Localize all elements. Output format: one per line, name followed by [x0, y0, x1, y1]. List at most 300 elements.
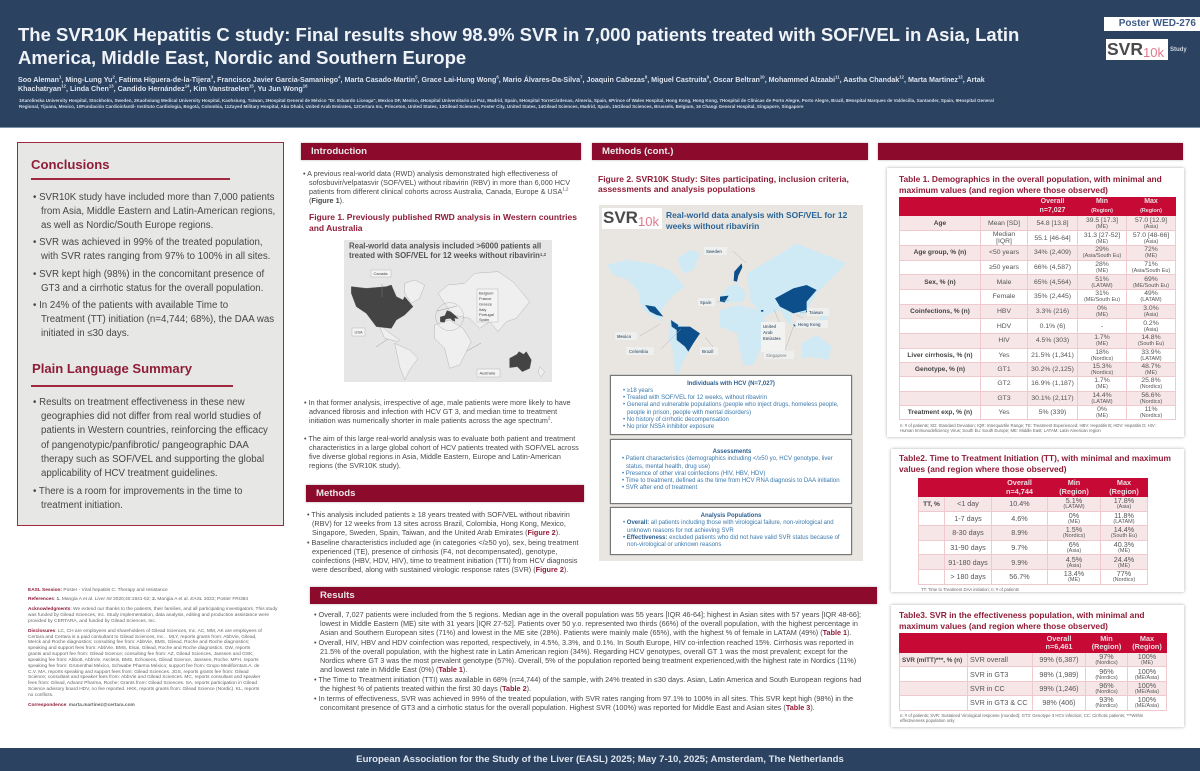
text: results bullets: lowest in Middle Eastern (ME) site with 31 years [IQR 27-52]. Patients over 50 y.o. represented two thirds (66%) of the overall population, with the highest percentage in: [320, 618, 858, 628]
table 1: demographics: (South Eu): [1138, 341, 1164, 347]
text: conclusions bullets: with SVR rates ranging from 97% to 100% in all sites.: [41, 251, 270, 262]
table 1: demographics: 31%: [1095, 290, 1109, 297]
table 2: time to treatment initiation: 9.9%: [1011, 558, 1028, 567]
labels: site countries: Colombia: [629, 349, 649, 354]
table 1: demographics: 16.9% (1,187): [1031, 380, 1074, 387]
table 1: demographics: (ME): [1145, 370, 1157, 376]
figure 2: heading: [666, 210, 847, 230]
table 1: demographics: 51%: [1095, 276, 1109, 283]
table 3: SVR: SVR (mITT)***, % (n): [902, 657, 962, 664]
table 2: time to treatment initiation: (Asia): [1067, 563, 1081, 569]
text: former analysis and aim: [304, 398, 579, 470]
table 2: time to treatment initiation: > 180 days: [950, 572, 986, 581]
text: assessments: • SVR after end of treatment: [622, 485, 697, 491]
box: analysis populations: [610, 507, 852, 555]
text: methods bullets: experienced (TE), presence of cirrhosis (F4, not decompensated), genotype,: [312, 546, 557, 556]
figure 2: logo: SVR: [603, 208, 638, 227]
table 2: time to treatment initiation: (LATAM): [1113, 519, 1135, 525]
table 1: demographics: GT2: [997, 380, 1011, 387]
text: results bullets: • Overall, 7,027 patients were included from the 5 regions. Median age in the overall population was 55 years [IQR 46-64]; highest in Asian sites with 57 years [IQR 48-66];: [314, 610, 861, 618]
section header: results: Results: [320, 590, 355, 601]
table 2: time to treatment initiation: 40.3%: [1114, 540, 1134, 549]
table 1: demographics: Overall: [1041, 198, 1064, 205]
table 1: demographics: (Region): [1140, 208, 1162, 214]
note: table 3 abbreviations: [900, 712, 1143, 723]
title: America, Middle East, Nordic and Southern Europe: [18, 46, 466, 68]
table 3: SVR: Overall: [1047, 634, 1071, 642]
labels: countries: USA: [354, 330, 363, 334]
text: session, references, acknowledgments, disclosures: C.V. MA, reports speaking and support fees from: Gilead Sciences. JGS, reports grants fee from: Gilead: [28, 670, 249, 675]
table 2: time to treatment initiation: 24.4%: [1114, 555, 1134, 564]
table 3: SVR: SVR in GT3 & CC: [970, 698, 1028, 707]
table 2: time to treatment initiation: (ME): [1118, 563, 1130, 569]
text: plain language bullets: • Results on treatment effectiveness in these new: [33, 397, 245, 408]
footer band: [0, 748, 1200, 771]
heading: figure 1: Figure 1. Previously published RWD analysis in Western countries: [309, 212, 577, 222]
table 3: SVR: (Nordics): [1095, 675, 1118, 681]
heading: plain language summary: Plain Language Summary: [32, 361, 192, 376]
text: methods bullets: were described, along with sustained virologic response rates (SVR) (Figure 2).: [312, 564, 568, 574]
text: individuals with HCV: people in prison, people with mental disorders): [627, 410, 751, 416]
affiliations: [19, 98, 994, 109]
text: session, references, acknowledgments, disclosures: Acknowledgments: We extend our thanks to the patients, their families, and all participating investigators. This study: [28, 607, 277, 612]
study logo: 10k: [1143, 45, 1164, 60]
table 3: SVR: (ME): [1141, 660, 1153, 666]
table 1: demographics: 34% (2,409): [1034, 249, 1071, 256]
table 1: demographics: (ME): [1096, 312, 1108, 318]
text: conclusions bullets: Treatment (TT) initiation (n=4,744; 68%), the DAA was: [41, 314, 274, 325]
text: methods bullets: • Baseline characteristics included age (in categories </≥50 yo), sex, being treatment: [307, 538, 578, 546]
table 1: demographics: Age: [934, 220, 946, 226]
text: analysis populations: • Effectiveness: excluded patients who did not have valid SVR status because of: [623, 535, 840, 541]
table 2: time to treatment initiation: 1.5%: [1066, 526, 1082, 534]
study label: Study: [1170, 47, 1187, 53]
table 2: time to treatment initiation: 31-90 days: [950, 543, 986, 552]
section header: methods continued: Methods (cont.): [602, 146, 673, 157]
text: former analysis and aim: • In that former analysis, irrespective of age, male patients were more likely to have: [304, 398, 570, 406]
text: former analysis and aim: characteristics in a large global cohort of HCV patients treated with SOF/VEL across: [309, 442, 579, 452]
labels: site countries: Spain: [700, 300, 712, 305]
figure 1: map of previous RWD analysis: Real-world data analysis included >6000 patients all: [349, 242, 541, 250]
table 1: demographics: (ME): [1096, 341, 1108, 347]
table 1: demographics: [IQR]: [996, 238, 1012, 245]
text: assessments: status, mental health, drug use): [626, 464, 710, 470]
table 1: demographics: 49%: [1144, 290, 1158, 297]
table 3: SVR: SVR in CC: [970, 684, 1005, 693]
table 1: demographics: (LATAM): [1140, 356, 1162, 362]
table 1: demographics: 54.8 [13.8]: [1036, 220, 1069, 226]
table 1: demographics: (Asia): [1144, 224, 1158, 230]
note: table 1 abbreviations: [900, 422, 1156, 433]
text: results bullets: • In terms of effectiveness, SVR was achieved in 99% of the treated population, with SVR rates ranging from 97.1% to 100% in all sites. This SVR kept high (98%) in the: [314, 694, 853, 702]
box: individuals with HCV: [610, 375, 852, 435]
table 2: time to treatment initiation: 13.4%: [1064, 569, 1084, 578]
text: former analysis and aim: advanced fibrosis and infection with HCV GT 3, and median time to treatment: [309, 406, 557, 416]
figure 2: heading: weeks without ribavirin: [666, 220, 759, 230]
table 2: time to treatment initiation: 4.5%: [1066, 555, 1082, 564]
table 2: time to treatment initiation: (ME): [1068, 577, 1080, 583]
table 1: demographics: (ME): [1096, 224, 1108, 230]
text: analysis populations: Analysis Populations: [701, 513, 761, 519]
table 1: demographics: n=7,027: [1040, 206, 1065, 214]
text: session, references, acknowledgments, disclosures: Merck and Roche diagnostics; consulting fee from: AbbVie, BMS, Gilead, Roche and Roche diagnostics;: [28, 640, 249, 645]
table 2: time to treatment initiation: 4.6%: [1011, 514, 1028, 523]
table 1: demographics: (ME/South Eu): [1084, 297, 1120, 303]
heading: table 3: Table3. SVR in the effectiveness population, with minimal and: [899, 610, 1145, 620]
text: session, references, acknowledgments, disclosures: EASL Session: Poster - Viral hepatitis C: Therapy and resistance: [28, 588, 168, 592]
text: session, references, acknowledgments, disclosures: Science advisory board HDV, no fee reported. HKK, reports grants from: Gilead Science (Nordic). KL, reports: [28, 687, 259, 692]
text: introduction paragraph: (Figure 1).: [309, 196, 344, 204]
text: assessments: • Presence of other viral coinfections (HIV, HBV, HDV): [622, 471, 765, 477]
labels: countries: Belgium: [479, 290, 494, 296]
table 2: time to treatment initiation: 8-30 days: [952, 528, 984, 537]
table 2: time to treatment initiation: (Asia): [1067, 548, 1081, 554]
table 1: demographics: (Nordics): [1091, 356, 1113, 362]
text: session, references, acknowledgments, disclosures: Certara and Certara is a paid consultant to Gilead Sciences, Inc. . MLY, reports grants from: AbbVie, Gilead,: [28, 635, 257, 640]
text: conclusions bullets: initiated in ≤30 days.: [41, 328, 129, 339]
text: plain language bullets: • There is a room for improvements in the time to: [33, 486, 242, 497]
table 1: demographics: 30.2% (2,125): [1031, 366, 1074, 373]
text: results bullets: • The Time to Treatment initiation (TTI) was available in 68% (n=4,744) of the sample, with 24% treated in ≤30 days. Asian, Latin America and South European regions had: [314, 674, 861, 684]
table 3: SVR: 99% (1,246): [1039, 684, 1079, 693]
table 1: demographics: 31.3 [27-52]: [1084, 232, 1120, 238]
heading: figure 2: assessments and analysis populations: [598, 184, 755, 194]
table 1: demographics: 25.8%: [1141, 377, 1161, 384]
text: assessments: • Time to treatment, defined as the time from HCV RNA diagnosis to DAA initiation: [622, 478, 840, 484]
labels: site countries: [615, 247, 829, 359]
table 1: demographics: Age group, % (n): [914, 249, 966, 256]
text: results bullets: and lowest rate in Middle East (0%) (Table 1).: [320, 664, 467, 674]
table 3: SVR: (Region): [1132, 642, 1162, 651]
labels: site countries: Taiwan: [809, 310, 823, 315]
labels: site countries: Brazil: [702, 349, 713, 354]
table 1: demographics: 15.3%: [1092, 363, 1112, 370]
text: conclusions bullets: • In 24% of the patients with available Time to: [33, 300, 228, 311]
text: session, references, acknowledgments, disclosures: grants and support fee from: Gilead Science; consulting fee from: AZ, Gilead Sciences, Janssen and GSK;: [28, 652, 254, 657]
affiliations: Regional, Tijuana, Mexico, 10Fundación Cardioinfantil- Instituto Cardiologia, Bogotá, Colombia, 11Zayed Military Hospital, Abu Dhabi, United Arab Emirates, 12Certara Inc, Princeton, United States, 13Gilead Sciences, Foster City, United States, 14Gilead Sciences, Madrid, Spain, 15Gilead Sciences, Brussels, Belgium, 16 Changi General Hospital, Singapore, Singapore: [19, 104, 803, 108]
table 1: demographics: 35% (2,445): [1034, 293, 1071, 300]
header band: [0, 0, 1200, 128]
text: session, references, acknowledgments, disclosures: was funded by Gilead Sciences, Inc. Study implementation, data analysis, editing and production assistance were: [28, 613, 269, 618]
table 2: time to treatment initiation: 6%: [1069, 540, 1079, 549]
table 1: demographics: 48.7%: [1141, 363, 1161, 370]
table 1: demographics: (ME): [1145, 253, 1157, 259]
table 1: demographics: (ME): [1096, 413, 1108, 419]
text: methods bullets: • This analysis included patients ≥ 18 years treated with SOF/VEL without ribavirin: [307, 510, 570, 518]
section header: introduction: [301, 143, 581, 160]
table 1: demographics: Median: [993, 231, 1015, 238]
text: assessments: Assessments: [713, 449, 751, 455]
text: plain language bullets: applicability of HCV treatment guidelines.: [41, 468, 218, 479]
table 1: demographics: 21.5% (1,341): [1031, 352, 1074, 359]
text: session, references, acknowledgments, disclosures: Disclosures: LC, CH are employees and shareholders of Gilead Sciences, Inc. AC, MM, AK are employees of: [28, 629, 262, 634]
text: individuals with HCV: • General and vulnerable populations (people who inject drugs, homeless people,: [623, 402, 839, 408]
text: plain language bullets: treatment initiation.: [41, 500, 123, 511]
panel: figure 2 background: [599, 205, 863, 561]
heading: figure 1: and Australia: [309, 223, 363, 233]
table 2: time to treatment initiation: TT, %: [923, 501, 940, 508]
table 1: demographics: 3.0%: [1143, 305, 1159, 312]
figure 2: heading: Real-world data analysis with SOF/VEL for 12: [666, 210, 847, 220]
text: results bullets: concomitant presence of GT3 and a cirrhotic status for the overall population. Highest SVR (100%) was reported for Middle East and Asian sites (Table 3).: [320, 702, 815, 712]
table 1: demographics: (Asia/South Eu): [1132, 268, 1170, 274]
labels: site countries: United: [763, 324, 776, 329]
table 2: time to treatment initiation: 11.8%: [1114, 511, 1134, 520]
table 1: demographics: 29%: [1095, 246, 1109, 253]
section header: tables column: [878, 143, 1183, 160]
authors: Khachatryan12, Linda Chen13, Candido Hernández14, Kim Vanstraelen15, Yu Jun Wong16: [18, 83, 307, 92]
table 1: demographics: Liver cirrhosis, % (n): [907, 352, 973, 359]
table 2: time to treatment initiation: 8.9%: [1011, 528, 1028, 537]
section header: methods: [306, 485, 584, 502]
table 3: SVR: (ME/Asia): [1135, 675, 1159, 681]
table 2: time to treatment initiation: <1 day: [957, 499, 979, 508]
table 1: demographics: 14.8%: [1141, 334, 1161, 341]
table 1: demographics: (ME): [1096, 268, 1108, 274]
table 2: time to treatment initiation: [918, 478, 1148, 585]
table 1: demographics: 0%: [1097, 305, 1107, 312]
heading: table 1: Table 1. Demographics in the overall population, with minimal and: [899, 174, 1162, 184]
table 1: demographics: HBV: [997, 308, 1011, 315]
table 2: time to treatment initiation: (ME): [1118, 548, 1130, 554]
table 3: SVR: Max: [1140, 634, 1154, 642]
text: former analysis and aim: regions (the SVR10K study).: [309, 460, 401, 470]
table 1: demographics: 66% (4,587): [1034, 264, 1071, 271]
table 1: demographics: Genotype, % (n): [915, 366, 965, 373]
table 1: demographics: 4.5% (303): [1036, 337, 1069, 344]
study logo: SVR: [1107, 39, 1143, 59]
study logo: [1106, 39, 1168, 60]
table 1: demographics: [899, 197, 1176, 420]
box: assessments: [610, 439, 852, 504]
table 1: demographics: (Nordics): [1091, 370, 1113, 376]
table 1: demographics: 18%: [1095, 349, 1109, 356]
text: plain language bullets: geographies did not differ from real world studies of: [41, 411, 261, 422]
text: individuals with HCV: • ≥18 years: [623, 388, 653, 394]
table 1: demographics: <50 years: [989, 249, 1019, 256]
text: session, references, acknowledgments, disclosures: provided by CERTARA, and funded by Gilead Sciences, Inc.: [28, 619, 156, 624]
text: session, references, acknowledgments, disclosures: speaking and support fees from: AbbVie, BMS, Eisai, Gilead, Roche and Roche diagnostics. GW, reports: [28, 646, 250, 651]
text: analysis populations: unknown reasons for not achieving SVR: [627, 528, 734, 534]
table 3: SVR: SVR in GT3: [970, 670, 1008, 679]
table 3: SVR: (Nordics): [1095, 703, 1118, 709]
note: table 3 abbreviations: n: # of patients; SVR: Sustained Virological response (rounded); GT3: Genotype 3 HCV infection; CC: Cirrhotic patients; ***Within: [900, 712, 1143, 718]
table 3: SVR: 98% (406): [1042, 698, 1076, 707]
text: analysis populations: non-virological or unknown reasons: [627, 542, 721, 548]
table 1: demographics: 71%: [1144, 261, 1158, 268]
table 1: demographics: (Asia): [1144, 312, 1158, 318]
table 1: demographics: (LATAM): [1091, 283, 1113, 289]
heading: table 1: maximum values (and region where those observed): [899, 184, 1108, 194]
heading: table 3: maximum values (and region where those observed): [899, 620, 1108, 630]
table 2: time to treatment initiation: 77%: [1117, 569, 1131, 578]
heading: table 2: values (and region where those observed): [899, 464, 1067, 474]
table 2: time to treatment initiation: 9.7%: [1011, 543, 1028, 552]
text: introduction paragraph: • A previous real-world data (RWD) analysis demonstrated high effectiveness of: [303, 168, 558, 178]
table 3: SVR: (ME/Asia): [1135, 689, 1159, 695]
table 3: SVR: (Nordics): [1095, 689, 1118, 695]
figure 2: logo: 10k: [638, 214, 659, 229]
table 1: demographics: 0%: [1097, 406, 1107, 413]
heading: table 1: [899, 174, 1162, 194]
text: session, references, acknowledgments, disclosures: no conflicts.: [28, 693, 53, 698]
table 2: time to treatment initiation: (South Eu): [1111, 533, 1137, 539]
text: methods bullets: Singapore, Sweden, Spain, Taiwan, and the United Arab Emirates (Figure 2).: [312, 528, 560, 536]
table 1: demographics: (Nordics): [1140, 399, 1162, 405]
labels: countries: Spain: [479, 317, 489, 322]
table 1: demographics: 28%: [1095, 261, 1109, 268]
table 2: time to treatment initiation: 5.1%: [1066, 496, 1082, 505]
table 1: demographics: ≥50 years: [989, 264, 1019, 271]
text: session, references, acknowledgments, disclosures: [28, 588, 278, 708]
labels: countries: France: [479, 296, 492, 301]
table 3: SVR: Min: [1100, 634, 1113, 642]
title: The SVR10K Hepatitis C study: Final results show 98.9% SVR in 7,000 patients treated with SOF/VEL in Asia, Latin: [18, 24, 1019, 44]
panel: table 3: [891, 605, 1184, 727]
table 1: demographics: -: [1101, 323, 1103, 330]
table 2: time to treatment initiation: 56.7%: [1009, 572, 1030, 581]
table 2: time to treatment initiation: 17.8%: [1114, 496, 1134, 505]
table 1: demographics: (Nordics): [1140, 384, 1162, 390]
text: assessments: • Patient characteristics (demographics including </≥50 yo, HCV genotype, liver: [622, 456, 833, 462]
text: introduction paragraph: [303, 168, 570, 204]
note: table 1 abbreviations: Human Immunodeficiency Virus; South Eu: South Europe; ME: Middle East; LATAM: Latin American region: [900, 428, 1101, 432]
table 1: demographics: (Asia): [1144, 238, 1158, 244]
heading: figure 1: [309, 212, 577, 233]
note: table 2 abbreviations: TT: Time to Treatment DAA initiation; n: # of patients: [921, 586, 1019, 592]
text: introduction paragraph: patients from different clinical cohorts across Australia, Canada, Europe & USA1,2: [309, 186, 568, 196]
table 3: SVR: SVR overall: [970, 655, 1008, 664]
text: session, references, acknowledgments, disclosures: Science; consultant and speaker fees from: AbbVie and Gilead Sciences. MC, reports consultant and speaker: [28, 675, 260, 680]
table 1: demographics: GT3: [997, 395, 1011, 402]
table 2: time to treatment initiation: 0%: [1069, 511, 1079, 520]
text: methods bullets: (RBV) for 12 weeks from 13 sites across Brazil, Colombia, Hong Kong, Mexico,: [312, 518, 566, 528]
table 1: demographics: 30.1% (2,117): [1031, 395, 1074, 402]
table 1: demographics: 11%: [1144, 406, 1158, 413]
heading: figure 2: Figure 2. SVR10K Study: Sites participating, inclusion criteria,: [598, 174, 849, 184]
table 2: time to treatment initiation: n=4,744: [1006, 486, 1033, 496]
text: individuals with HCV: • No prior NS5A inhibitor exposure: [623, 424, 714, 430]
text: analysis populations: • Overall: all patients including those with virological failure, non-virological and: [623, 520, 834, 526]
heading: table 2: [899, 453, 1171, 474]
poster number: Poster WED-276: [1119, 18, 1196, 29]
table 1: demographics: Treatment exp, % (n): [908, 409, 972, 416]
panel: table 1: [887, 168, 1184, 437]
table 2: time to treatment initiation: 10.4%: [1009, 499, 1030, 508]
text: plain language bullets: therapy such as SOF/VEL and supporting the global: [41, 454, 264, 465]
text: results bullets: 21.5% of the overall population, with the highest rate in Latin American region (34%). Regarding HCV genotypes, overall GT 1 was the most prevalent; except for the: [320, 646, 848, 656]
table 1: demographics: 0.2%: [1143, 320, 1159, 327]
table 1: demographics: 72%: [1144, 246, 1158, 253]
text: results bullets: [314, 610, 861, 712]
figure 2: logo: [602, 208, 662, 229]
table 1: demographics: 65% (4,564): [1034, 279, 1071, 286]
table 1: demographics: 56.6%: [1141, 392, 1161, 399]
section header: results: [310, 587, 877, 604]
text: results bullets: Nordics where GT 3 was the most prevalent genotype (57%). Overall, 5% of the population reported being treatment experienced,with the highest rate in Nordics (11%): [320, 656, 856, 664]
table 3: SVR: 98% (1,989): [1039, 670, 1079, 679]
table 1: demographics: (Asia): [1144, 327, 1158, 333]
table 2: time to treatment initiation: (Asia): [1117, 504, 1131, 510]
figure 1: map of previous RWD analysis: [344, 240, 552, 382]
text: conclusions bullets: • SVR was achieved in 99% of the treated population,: [33, 237, 263, 248]
table 3: SVR: [899, 633, 1167, 711]
table 1: demographics: 5% (339): [1039, 409, 1066, 416]
text: results bullets: the highest % of patients treated within the first 30 days (Table 2).: [320, 684, 531, 692]
text: plain language bullets: [33, 397, 268, 511]
table 1: demographics: 57.0 [48-66]: [1133, 232, 1169, 238]
figure 2: world map of participating sites: [606, 244, 846, 375]
text: conclusions bullets: • SVR10K study have included more than 7,000 patients: [33, 192, 274, 202]
labels: site countries: Sweden: [706, 249, 722, 254]
table 1: demographics: HIV: [998, 337, 1010, 344]
affiliations: 1Karolinska University Hospital, Stockholm, Sweden, 2Kaohsiung Medical University Hospital, Kaohsiung, Taiwan, 3Hospital General de México "Dr. Eduardo Liceaga", Mexico DF, Mexico, 4Hospital Universitario La Paz, Madrid, Spain, 5Hospital TorreCárdenas, Almeria, Spain, 6Prince of Wales Hospital, Hong Kong, Hong Kong, 7Hospital de Clínicas de Porto Alegre, Porto Alegre, Brazil, 8Hospital Marques de Valdecilla, Santander, Spain, 9Hospital General: [19, 98, 994, 102]
text: conclusions bullets: [33, 192, 275, 339]
section header: introduction: Introduction: [311, 146, 367, 157]
text: former analysis and aim: five diverse global regions in Asia, Middle Eastern, Europe and Latin-American: [309, 452, 561, 460]
labels: site countries: Arab: [763, 330, 773, 335]
table 1: demographics: (ME): [1096, 384, 1108, 390]
table 1: demographics: Female: [993, 293, 1015, 300]
table 3: SVR: (Nordics): [1095, 660, 1118, 666]
table 1: demographics: (Region): [1091, 208, 1113, 214]
table 2: time to treatment initiation: (Nordics): [1113, 577, 1135, 583]
table 1: demographics: (Nordics): [1140, 413, 1162, 419]
note: table 1 abbreviations: n: # of patients; SD: Standard Deviation; IQR: Interquartile Range; TE: Treatment Experienced; HBV: Hepatitis B; HDV: Hepatitis D; HIV:: [900, 422, 1156, 428]
section header: methods continued: [592, 143, 868, 160]
table 1: demographics: Sex, % (n): [924, 279, 956, 286]
table 2: time to treatment initiation: (Region): [1059, 486, 1089, 496]
title: [18, 24, 1019, 68]
labels: countries: Italy: [479, 307, 486, 312]
table 3: SVR: n=6,461: [1046, 642, 1072, 651]
table 1: demographics: Max: [1144, 198, 1158, 205]
labels: countries: Australia: [480, 370, 496, 376]
footer band: European Association for the Study of the Liver (EASL) 2025; May 7-10, 2025; Amsterdam, The Netherlands: [356, 754, 844, 765]
heading: table 3: [899, 610, 1145, 630]
figure 1: map of previous RWD analysis: treated with SOF/VEL for 12 weeks without ribavirin: [349, 251, 540, 260]
text: former analysis and aim: • The aim of this large real-world analysis was to evaluate both patient and treatment: [304, 434, 575, 442]
text: individuals with HCV: [623, 380, 839, 430]
text: individuals with HCV: Individuals with HCV (N=7,027): [687, 380, 775, 386]
table 1: demographics: 57.0 [12.9]: [1135, 216, 1167, 224]
labels: site countries: Emirates: [763, 336, 781, 341]
table 2: time to treatment initiation: (Nordics): [1063, 533, 1085, 539]
table 1: demographics: 0.1% (6): [1040, 323, 1065, 330]
text: conclusions bullets: as well as Nordic/South Europe regions.: [41, 220, 213, 231]
table 1: demographics: (Asia/South Eu): [1083, 253, 1121, 259]
table 3: SVR: 99% (6,387): [1039, 655, 1079, 664]
text: conclusions bullets: • SVR kept high (98%) in the concomitant presence of: [33, 269, 264, 280]
table 1: demographics: Min: [1096, 198, 1108, 205]
table 1: demographics: 14.4%: [1092, 392, 1112, 399]
heading: conclusions: Conclusions: [31, 157, 110, 172]
table 2: time to treatment initiation: (LATAM): [1063, 504, 1085, 510]
table 1: demographics: Yes: [998, 409, 1010, 416]
table 1: demographics: 33.9%: [1141, 349, 1161, 356]
table 1: demographics: GT1: [997, 366, 1011, 373]
table 2: time to treatment initiation: (Region): [1109, 486, 1139, 496]
table 3: SVR: (ME/Asia): [1135, 703, 1159, 709]
section header: methods: Methods: [316, 488, 355, 499]
text: introduction paragraph: sofosbuvir/velpatasvir (SOF/VEL) without ribavirin (RBV) in more than 6,000 HCV: [309, 178, 570, 186]
note: table 3 abbreviations: effectiveness population only: [900, 718, 955, 722]
text: session, references, acknowledgments, disclosures: speaking fee from: Grünenthal México, Schwabe Pharma México; support fee from: Grupo MediforntaS.A. de: [28, 664, 259, 669]
text: methods bullets: [307, 510, 578, 574]
text: session, references, acknowledgments, disclosures: fees from: Gilead, Advanz Pharma, Roche; Grants from: Gilead Sciences. SA, reports participation in Gilead: [28, 681, 257, 686]
text: methods bullets: coinfections (HBV, HDV, HIV), time to treatment initiation (TTI) from HCV diagnosis: [312, 556, 577, 564]
table 1: demographics: (LATAM): [1140, 297, 1162, 303]
